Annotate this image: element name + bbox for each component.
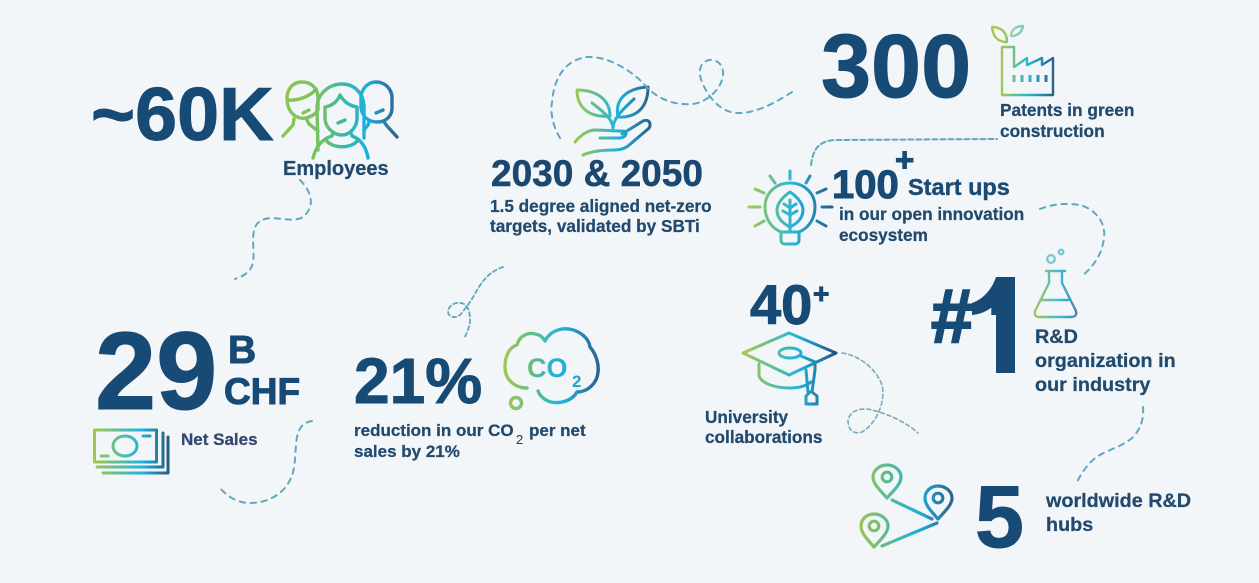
description: patents: Patents in green — [1000, 100, 1134, 120]
panel: R&D hubs — [861, 465, 1191, 566]
panel: university collaborations — [705, 273, 836, 447]
panel: net sales — [94, 310, 300, 473]
description: targets — [490, 196, 712, 236]
icon text: subscript 2: 2 — [572, 372, 581, 391]
description: R&D: R&D — [1035, 326, 1078, 348]
connector: net sales to CO2 — [218, 421, 312, 503]
stat: number one: 1 — [960, 253, 1035, 402]
connector: R&D to hubs — [1077, 407, 1143, 482]
connector: employees to net sales — [235, 180, 311, 279]
stat: 300: 300 — [821, 17, 971, 117]
description: R&D — [1035, 326, 1176, 396]
description: hubs — [1045, 490, 1191, 536]
infographic canvas — [93, 24, 1190, 549]
stat: 2030 and 2050: 2030 & 2050 — [491, 153, 703, 194]
panel: R&D organization — [931, 250, 1176, 402]
stat plus sign: + — [813, 278, 829, 309]
stat: 5: 5 — [975, 467, 1024, 566]
description: start ups: ecosystem — [839, 225, 928, 245]
icon: flask — [1035, 250, 1076, 317]
icon: CO2 cloud — [505, 329, 598, 408]
stat unit: B: B — [228, 329, 256, 372]
description: hubs: worldwide R&D — [1045, 490, 1191, 512]
stat plus sign: + — [895, 141, 914, 178]
panel: CO2 reduction — [354, 329, 598, 461]
stat: 21 percent: 21% — [354, 345, 482, 417]
label: employees: Employees — [283, 158, 389, 180]
stat: 100: 100 — [832, 163, 899, 207]
connector: university to hubs — [842, 353, 918, 433]
icon: graduation cap — [743, 333, 836, 404]
label: net sales: Net Sales — [181, 430, 258, 449]
panel: start ups — [749, 141, 1024, 245]
icon: light bulb with leaf — [749, 171, 832, 244]
icon: green factory — [992, 26, 1053, 95]
description: CO2 reduction: per net — [529, 421, 586, 440]
description: patents — [1000, 100, 1134, 141]
panel: green patents — [821, 17, 1134, 141]
description: hubs: hubs — [1046, 514, 1093, 536]
description: start ups: in our open innovation — [839, 204, 1024, 224]
icon: map pins — [861, 465, 952, 547]
description: CO2 reduction: 2 — [516, 432, 523, 447]
icon: three people — [283, 82, 397, 158]
heading: start ups: Start ups — [908, 174, 1010, 200]
description: targets: 1.5 degree aligned net-zero — [490, 196, 712, 216]
connector: patents to start ups — [811, 139, 997, 165]
stat: 29: 29 — [95, 310, 217, 433]
description: university: University — [705, 407, 789, 427]
stat unit: CHF: CHF — [224, 371, 300, 412]
description: start ups — [839, 204, 1024, 245]
stat: about 60K: ~60K — [91, 72, 274, 156]
description: R&D: organization in — [1035, 350, 1176, 372]
connector: start ups to R&D — [1040, 204, 1104, 275]
description: university — [705, 407, 822, 447]
icon: hand holding plant — [575, 87, 650, 155]
icon text: CO2: CO — [527, 353, 568, 383]
stat: 40: 40 — [750, 273, 812, 336]
description: targets: targets, validated by SBTi — [490, 216, 700, 236]
connector: CO2 to targets — [448, 267, 503, 339]
panel: employees — [91, 72, 397, 180]
stat: hash sign: # — [931, 274, 973, 359]
description: university: collaborations — [705, 427, 822, 447]
icon: banknotes — [94, 430, 168, 473]
description: R&D: our industry — [1035, 374, 1150, 396]
description: patents: construction — [1000, 121, 1105, 141]
connector: plant to patents — [551, 57, 795, 138]
description: CO2 reduction: reduction in our CO — [354, 421, 514, 440]
description: CO2 reduction — [354, 421, 586, 461]
description: CO2 reduction: sales by 21% — [354, 442, 460, 461]
stat: number one — [972, 277, 1015, 373]
panel: net-zero targets — [490, 87, 712, 236]
